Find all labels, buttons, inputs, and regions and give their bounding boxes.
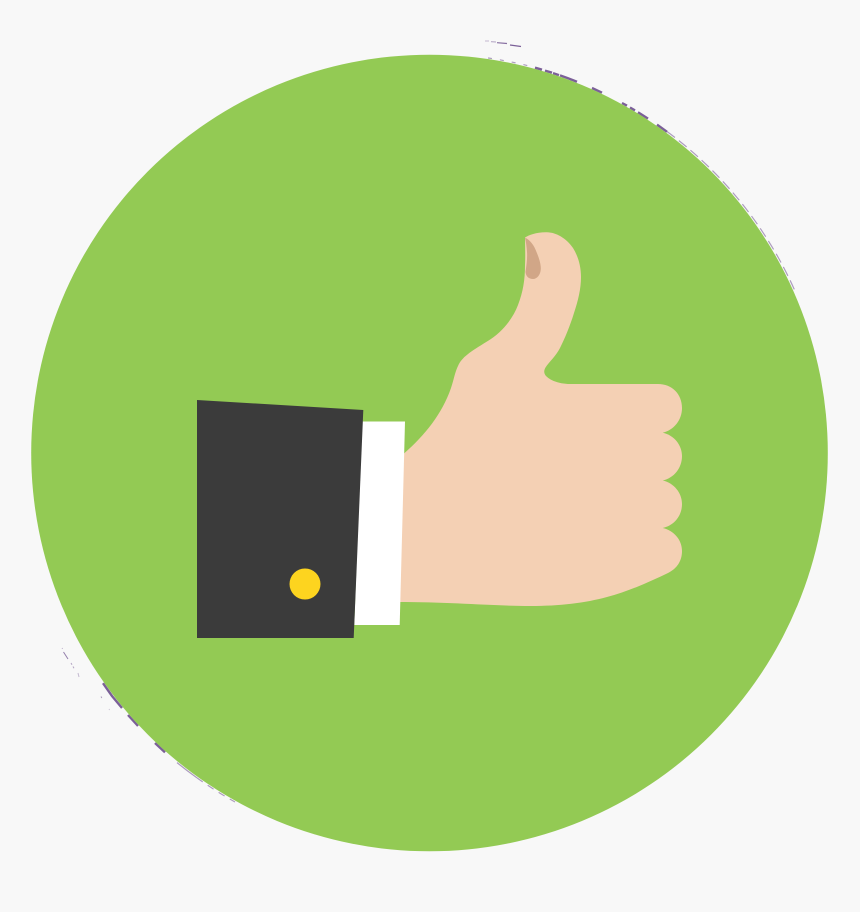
icon: yellow cuff button bbox=[290, 568, 320, 600]
stray marks above the circle bbox=[485, 41, 521, 46]
icon: shirt cuff bbox=[354, 422, 405, 625]
stray marks left of the circle bbox=[62, 648, 110, 710]
icon: thumbs up hand bbox=[398, 232, 682, 606]
thumbnail bbox=[525, 238, 541, 279]
purple edge slivers behind the circle bbox=[103, 58, 795, 802]
icon: jacket sleeve bbox=[197, 400, 363, 638]
hand bbox=[398, 232, 682, 606]
